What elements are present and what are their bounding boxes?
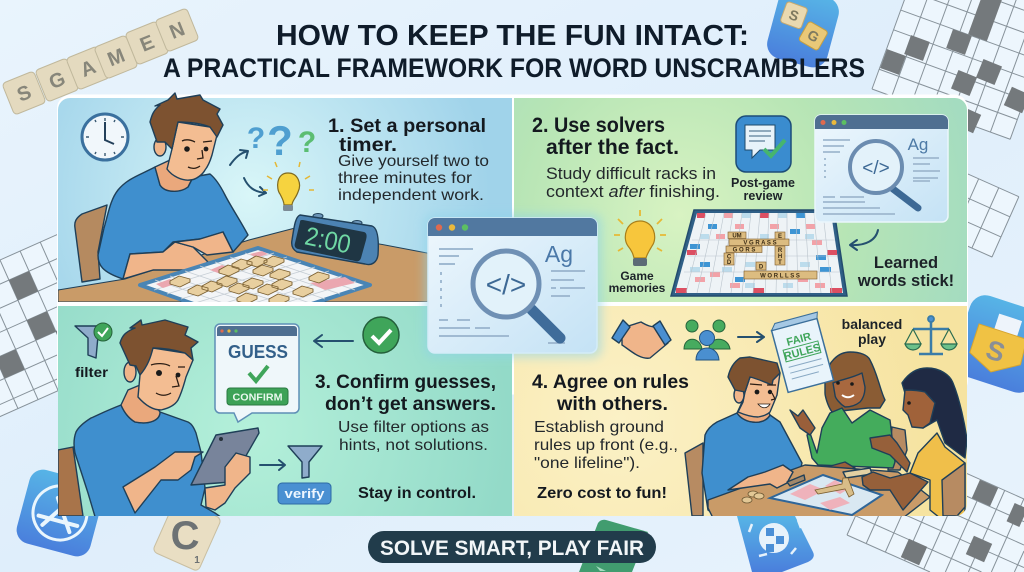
crossword: bottom right [847, 439, 1024, 572]
icon: fair rules book: RULES [783, 342, 822, 363]
label: learned words stick [857, 254, 954, 290]
icon: post-game review [736, 116, 791, 172]
person at desk [98, 93, 248, 279]
text: step 4 [532, 372, 689, 502]
chair: right [942, 463, 965, 516]
icon: blue grid app [737, 516, 814, 572]
text: step 3 [315, 372, 496, 502]
center window: code inspector [424, 214, 602, 358]
text: step 4: rules up front (e.g., [534, 437, 678, 454]
man's hand [728, 465, 793, 490]
chair: middle [888, 427, 907, 470]
text: step 1: 1. Set a personal [328, 116, 486, 137]
man in blue [702, 357, 802, 516]
label: post-game review: Post-game [731, 176, 795, 190]
banner: solve smart, play fair: SOLVE SMART, PLAY FAIR [380, 536, 644, 560]
label: balanced play: play [858, 331, 886, 347]
scrabble board: UM [732, 234, 742, 240]
label: filter: filter [75, 364, 109, 380]
crossword: top right [872, 0, 1024, 139]
scrabble board: V G R A S S [743, 240, 777, 246]
chair: left [685, 443, 703, 516]
tile rack [787, 475, 805, 486]
icon: people group [684, 320, 730, 360]
label: game memories [609, 269, 666, 295]
text: step 1: timer. [339, 135, 397, 156]
text: step 1 [328, 116, 489, 204]
label: balanced play [842, 316, 902, 347]
icon: light bulb [263, 162, 314, 211]
icon: wall clock [82, 114, 128, 160]
label: post-game review: review [744, 189, 783, 203]
icon: scales [905, 316, 957, 354]
icon: filter with check [75, 323, 112, 358]
panel: step 3 confirm [58, 306, 512, 520]
icon: letter tile C [150, 498, 222, 572]
rack: tiles [843, 468, 872, 478]
game board [770, 475, 882, 515]
crossword: right middle [892, 152, 1019, 257]
letter tiles: SGAMEN: N [167, 18, 188, 44]
panel: step 1 timer [58, 93, 512, 324]
title [163, 20, 865, 83]
arrow: window to words [850, 230, 878, 250]
label: learned words stick: Learned [874, 254, 938, 272]
text: step 2: Study difficult racks in [546, 165, 716, 183]
icon: question marks: ? [247, 122, 265, 155]
letter tiles: SGAMEN: A [78, 56, 99, 82]
icon: green app behind banner [579, 520, 648, 572]
icon: blue app badge [13, 466, 107, 560]
letter tiles: SGAMEN: S [14, 81, 35, 107]
text: step 4: Establish ground [534, 419, 664, 436]
game board [138, 246, 372, 302]
label: learned words stick: words stick! [857, 272, 954, 290]
callout: guess confirm: GUESS [228, 342, 288, 362]
callout: guess confirm: CONFIRM [232, 392, 282, 404]
center window: code inspector: Ag [545, 241, 573, 267]
scrabble board: W O R L L S S [760, 274, 800, 280]
icon: letter tile C: 1 [194, 555, 200, 566]
label: verify: verify [284, 486, 325, 501]
scrabble board [671, 210, 847, 296]
icon: funnel [288, 446, 322, 478]
letter tiles: SGAMEN: E [137, 31, 158, 57]
woman in yellow [862, 368, 967, 518]
arrow: tablet to funnel [260, 460, 285, 470]
icon: green check circle [363, 317, 399, 353]
icon: fair rules book: FAIR [785, 331, 813, 349]
icon: handshake [612, 320, 671, 358]
text: step 4: 4. Agree on rules [532, 372, 689, 393]
scrabble board: T [778, 260, 782, 266]
text: step 2 [532, 114, 720, 201]
panel: step 2 solvers [514, 98, 967, 302]
icon: S shield app [949, 291, 1024, 397]
chair [75, 205, 107, 282]
text: step 3: 3. Confirm guesses, [315, 372, 496, 393]
label: balanced play: balanced [842, 316, 902, 332]
table [708, 465, 930, 518]
text: step 2: context after finishing. [546, 183, 720, 201]
text: step 2: 2. Use solvers [532, 114, 665, 137]
text: step 3: Stay in control. [358, 485, 476, 502]
digital timer: 2:00 [302, 221, 354, 259]
callout: guess confirm [215, 324, 299, 422]
title: A PRACTICAL FRAMEWORK FOR WORD UNSCRAMBLERS [163, 53, 865, 83]
letter tiles: SGAMEN: M [105, 45, 128, 71]
icon: SG tiles app: G [805, 26, 822, 46]
icon: letter tile C: C [171, 514, 199, 558]
icon: game memories bulb [614, 210, 666, 266]
arrow: people to rules [738, 332, 764, 342]
label: verify [278, 483, 331, 504]
label: game memories: memories [609, 281, 666, 295]
text: step 2: after the fact. [546, 136, 679, 159]
scrabble board: H [778, 254, 782, 260]
text: step 1: three minutes for [338, 170, 473, 187]
letter tiles: SGAMEN [2, 8, 199, 115]
center window: code inspector: </> [486, 269, 526, 300]
icon: S shield app: S [982, 334, 1009, 368]
text: step 3: hints, not solutions. [339, 437, 488, 454]
scrabble board: D [727, 260, 732, 266]
icon: question marks: ? [298, 126, 316, 159]
letter tiles: SGAMEN: G [46, 68, 69, 94]
chair [58, 447, 83, 516]
window: code inspector [815, 115, 948, 222]
window: code inspector: Ag [908, 135, 928, 154]
window: code inspector: </> [862, 158, 890, 179]
arrow: to question marks [230, 150, 248, 165]
scrabble board: E [778, 234, 782, 240]
text: step 3: Use filter options as [338, 419, 489, 436]
scrabble board: C [727, 254, 732, 260]
icon: SG tiles app: S [787, 6, 801, 24]
icon: question marks: ? [267, 117, 293, 164]
panel: step 4 agree [514, 306, 967, 518]
scrabble board: G O R S [733, 248, 755, 254]
panel frame [57, 94, 968, 394]
text: step 4: Zero cost to fun! [537, 485, 667, 502]
arrow: check to guess [314, 335, 353, 347]
person with tablet [74, 320, 259, 520]
crossword: left [0, 233, 118, 426]
text: step 3: don’t get answers. [325, 394, 496, 415]
text: step 4: with others. [556, 394, 668, 415]
icon: fair rules book [770, 312, 835, 392]
text: step 4: "one lifeline"). [534, 455, 640, 472]
spare tiles [742, 491, 764, 503]
woman in green [790, 352, 895, 472]
label: post-game review [731, 176, 795, 203]
text: step 1: Give yourself two to [338, 153, 489, 170]
arrow: to light bulb [244, 178, 266, 196]
scrabble board: R [778, 248, 783, 254]
digital timer [292, 214, 378, 265]
text: step 1: independent work. [338, 187, 484, 204]
icon: SG tiles app [764, 0, 842, 71]
icon: question marks [247, 117, 316, 164]
label: game memories: Game [620, 269, 654, 283]
scrabble board: D [759, 264, 764, 270]
title: HOW TO KEEP THE FUN INTACT: [276, 20, 749, 52]
